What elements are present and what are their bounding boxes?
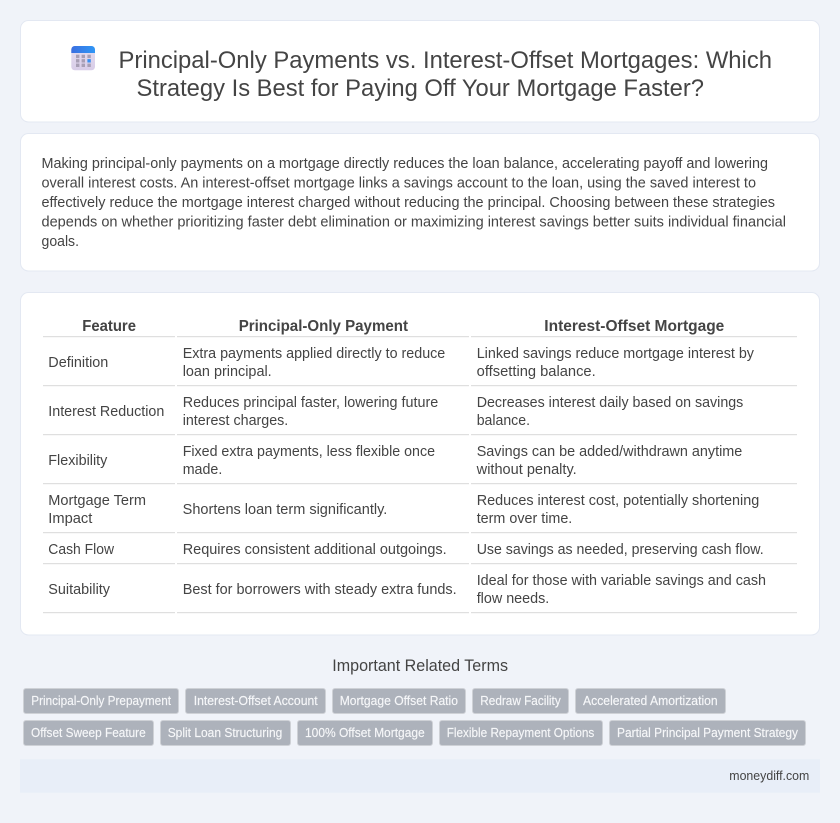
panel: header: [20, 20, 820, 122]
row: interest reduction: [48, 395, 743, 429]
intro paragraph: depends on whether prioritizing faster debt elimination or maximizing interest savings better suits individual financial: [42, 214, 786, 230]
tag: accelerated amortization: [576, 688, 726, 714]
table header row: [82, 318, 724, 335]
tag: split loan structuring: [160, 720, 290, 746]
row: flexibility: made.: [183, 462, 222, 478]
row: definition: loan principal.: [183, 364, 272, 380]
table header row: Principal-Only Payment: [239, 318, 409, 335]
icon: calendar: [71, 46, 95, 70]
tag: accelerated amortization: Accelerated Amortization: [583, 694, 718, 708]
tag: interest-offset account: Interest-Offset Account: [194, 694, 318, 708]
row: flexibility: without penalty.: [476, 462, 577, 478]
row: definition: offsetting balance.: [477, 364, 596, 380]
row: mortgage term impact: term over time.: [477, 511, 572, 527]
heading: important related terms: Important Related Terms: [332, 657, 508, 675]
tag: redraw facility: Redraw Facility: [480, 694, 561, 708]
related term tags: [24, 688, 806, 746]
row: cash flow: Requires consistent additional outgoings.: [183, 542, 447, 558]
row: flexibility: Flexibility: [48, 453, 108, 469]
row: interest reduction: Reduces principal faster, lowering future: [183, 395, 438, 411]
tag: offset sweep feature: Offset Sweep Feature: [31, 726, 146, 740]
tag: interest-offset account: [186, 688, 326, 714]
tag: 100% offset mortgage: 100% Offset Mortgage: [305, 726, 425, 740]
row: interest reduction: Interest Reduction: [48, 404, 164, 420]
intro paragraph: effectively reduce the mortgage interest charged without reducing the principal. Choosing between these strategies: [42, 195, 775, 211]
row: cash flow: Use savings as needed, preserving cash flow.: [477, 542, 764, 558]
tag: flexible repayment options: Flexible Repayment Options: [447, 726, 594, 740]
intro paragraph: overall interest costs. An interest-offset mortgage links a savings account to the loan, using the saved interest to: [42, 176, 756, 192]
tag: partial principal payment strategy: Partial Principal Payment Strategy: [617, 726, 799, 740]
tag: 100% offset mortgage: [298, 720, 432, 746]
footer bar: [20, 759, 820, 793]
tag: mortgage offset ratio: [332, 688, 466, 714]
row: definition: Linked savings reduce mortgage interest by: [477, 346, 755, 362]
tag: split loan structuring: Split Loan Structuring: [168, 726, 282, 740]
tag: offset sweep feature: [24, 720, 154, 746]
panel: intro: [20, 134, 820, 271]
row: flexibility: Savings can be added/withdrawn anytime: [477, 444, 742, 460]
row: mortgage term impact: Shortens loan term significantly.: [183, 502, 387, 518]
row: cash flow: Cash Flow: [48, 542, 114, 558]
row: mortgage term impact: Mortgage Term: [48, 493, 146, 509]
row: mortgage term impact: Impact: [48, 511, 92, 527]
title: [118, 47, 772, 102]
tag: flexible repayment options: [440, 720, 602, 746]
tag: redraw facility: [472, 688, 568, 714]
row: interest reduction: balance.: [477, 413, 530, 429]
row: suitability: Best for borrowers with steady extra funds.: [183, 582, 457, 598]
tag: mortgage offset ratio: Mortgage Offset Ratio: [340, 694, 458, 708]
row: mortgage term impact: Reduces interest cost, potentially shortening: [477, 493, 759, 509]
title: Strategy Is Best for Paying Off Your Mortgage Faster?: [136, 75, 704, 102]
row: interest reduction: interest charges.: [183, 413, 288, 429]
row: definition: Definition: [48, 355, 108, 371]
tag: partial principal payment strategy: [610, 720, 806, 746]
row: mortgage term impact: [48, 493, 759, 527]
tag: principal-only prepayment: Principal-Only Prepayment: [31, 694, 171, 708]
row: definition: [48, 346, 755, 380]
intro paragraph: Making principal-only payments on a mortgage directly reduces the loan balance, accelerating payoff and lowering: [42, 156, 768, 172]
row: flexibility: Fixed extra payments, less flexible once: [183, 444, 435, 460]
row: suitability: flow needs.: [477, 591, 549, 607]
table header row: Feature: [82, 318, 136, 335]
row: interest reduction: Decreases interest daily based on savings: [477, 395, 743, 411]
row: suitability: [48, 573, 766, 607]
footer bar: moneydiff.com: [729, 768, 809, 783]
table header row: Interest-Offset Mortgage: [544, 318, 724, 335]
tag: principal-only prepayment: [24, 688, 178, 714]
row: suitability: Ideal for those with variable savings and cash: [477, 573, 766, 589]
row: flexibility: [48, 444, 742, 478]
row: cash flow: [48, 542, 764, 558]
panel: comparison table: [20, 292, 820, 635]
title: Principal-Only Payments vs. Interest-Offset Mortgages: Which: [118, 47, 772, 74]
intro paragraph: goals.: [42, 234, 79, 250]
row: definition: Extra payments applied directly to reduce: [183, 346, 445, 362]
intro paragraph: [42, 156, 786, 250]
row: suitability: Suitability: [48, 582, 111, 598]
